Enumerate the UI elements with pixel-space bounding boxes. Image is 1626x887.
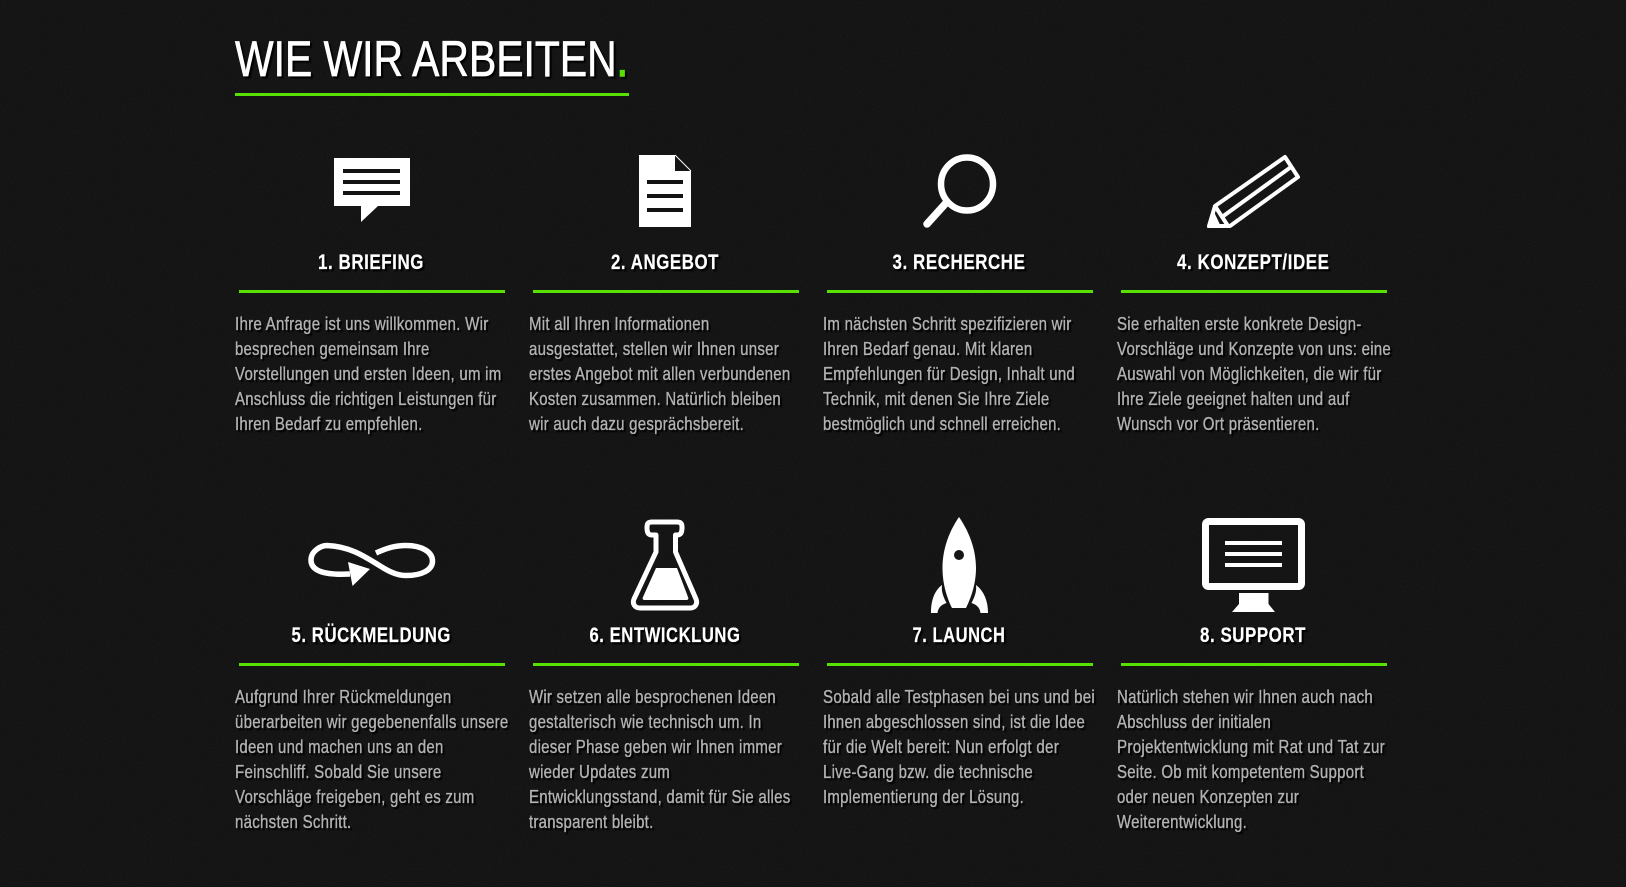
rule: step 2 <box>533 290 799 293</box>
text: step 7 description: Ihnen abgeschlossen sind, ist die Idee <box>823 712 1085 732</box>
text: step 3 description: bestmöglich und schnell erreichen. <box>823 414 1061 434</box>
heading: 4. Konzept/Idee: 4. KONZEPT/IDEE <box>1177 250 1330 274</box>
icon: monitor <box>1206 522 1302 612</box>
text: step 2 description: ausgestattet, stellen wir Ihnen unser <box>529 339 779 359</box>
text: step 6 description: gestalterisch wie technisch um. In <box>529 712 762 732</box>
panel: step 7 launch <box>823 517 1095 807</box>
text: step 1 description: besprechen gemeinsam Ihre <box>235 339 430 359</box>
text: step 3 description: Empfehlungen für Design, Inhalt und <box>823 364 1075 384</box>
text: step 3 description <box>823 314 1075 434</box>
rule: step 5 <box>239 663 505 666</box>
text: step 3 description: Ihren Bedarf genau. Mit klaren <box>823 339 1032 359</box>
text: step 2 description: erstes Angebot mit allen verbundenen <box>529 364 790 384</box>
text: step 3 description: Im nächsten Schritt spezifizieren wir <box>823 314 1072 334</box>
icon: flask <box>633 522 697 608</box>
text: step 1 description: Vorstellungen und ersten Ideen, um im <box>235 364 502 384</box>
text: step 2 description <box>528 314 790 434</box>
text: step 4 description: Auswahl von Möglichkeiten, die wir für <box>1117 364 1382 384</box>
heading: 6. Entwicklung: 6. ENTWICKLUNG <box>590 623 740 647</box>
panel: step 5 rueckmeldung <box>235 546 508 832</box>
text: step 4 description: Vorschläge und Konzepte von uns: eine <box>1117 339 1391 359</box>
rule: step 4 <box>1121 290 1387 293</box>
title: WIE WIR ARBEITEN. <box>235 31 628 87</box>
heading: 1. Briefing: 1. BRIEFING <box>318 250 424 274</box>
text: step 7 description: Live-Gang bzw. die technische <box>823 762 1033 782</box>
panel: step 8 support <box>1117 522 1387 832</box>
text: step 5 description: Ideen und machen uns an den <box>235 737 444 757</box>
text: step 6 description: Wir setzen alle besprochenen Ideen <box>529 687 776 707</box>
text: step 5 description <box>235 687 508 832</box>
text: step 5 description: Vorschläge freigeben, geht es zum <box>235 787 474 807</box>
text: step 5 description: Aufgrund Ihrer Rückmeldungen <box>235 687 452 707</box>
text: step 6 description: transparent bleibt. <box>529 812 654 832</box>
text: step 8 description: oder neuen Konzepten zur <box>1117 787 1299 807</box>
text: step 4 description <box>1117 314 1391 434</box>
rule: step 8 <box>1121 663 1387 666</box>
text: step 8 description: Weiterentwicklung. <box>1117 812 1247 832</box>
text: step 2 description: Mit all Ihren Informationen <box>529 314 710 334</box>
text: step 4 description: Ihre Ziele geeignet halten und auf <box>1117 389 1350 409</box>
heading: 8. Support: 8. SUPPORT <box>1200 623 1306 647</box>
text: step 7 description <box>823 687 1095 807</box>
text: step 6 description <box>528 687 790 832</box>
text: step 5 description: Feinschliff. Sobald Sie unsere <box>235 762 442 782</box>
text: step 7 description: Implementierung der Lösung. <box>823 787 1024 807</box>
text: step 8 description: Seite. Ob mit kompetentem Support <box>1117 762 1364 782</box>
panel: step 3 recherche <box>823 158 1093 434</box>
panel: step 6 entwicklung <box>528 522 799 832</box>
text: step 8 description <box>1117 687 1385 832</box>
text: step 1 description: Anschluss die richtigen Leistungen für <box>235 389 496 409</box>
heading: 2. Angebot: 2. ANGEBOT <box>611 250 719 274</box>
text: step 7 description: für die Welt bereit: Nun erfolgt der <box>823 737 1059 757</box>
text: step 8 description: Natürlich stehen wir Ihnen auch nach <box>1117 687 1373 707</box>
text: step 5 description: nächsten Schritt. <box>235 812 352 832</box>
rule: step 7 <box>827 663 1093 666</box>
rule: step 1 <box>239 290 505 293</box>
text: step 2 description: Kosten zusammen. Natürlich bleiben <box>529 389 781 409</box>
text: step 6 description: Entwicklungsstand, damit für Sie alles <box>529 787 790 807</box>
heading: 5. Rückmeldung: 5. RÜCKMELDUNG <box>292 622 451 647</box>
text: step 4 description: Sie erhalten erste konkrete Design- <box>1117 314 1362 334</box>
text: step 3 description: Technik, mit denen Sie Ihre Ziele <box>823 389 1050 409</box>
icon: rocket <box>931 517 988 613</box>
text: step 8 description: Projektentwicklung mit Rat und Tat zur <box>1117 737 1385 757</box>
rule: step 6 <box>533 663 799 666</box>
text: step 1 description <box>235 314 502 434</box>
text: step 1 description: Ihren Bedarf zu empfehlen. <box>235 414 422 434</box>
icon: infinity loop with arrow <box>311 546 432 586</box>
text: step 6 description: dieser Phase geben wir Ihnen immer <box>529 737 782 757</box>
text: step 6 description: wieder Updates zum <box>528 762 670 782</box>
text: step 2 description: wir auch dazu gesprächsbereit. <box>528 414 744 434</box>
text: step 1 description: Ihre Anfrage ist uns willkommen. Wir <box>235 314 488 334</box>
text: step 8 description: Abschluss der initialen <box>1117 712 1271 732</box>
icon: pencil <box>1208 157 1298 227</box>
panel: step 1 briefing <box>235 158 505 434</box>
icon: magnifier <box>927 158 993 224</box>
icon: speech bubble <box>334 158 410 222</box>
panel: step 4 konzept <box>1117 157 1391 434</box>
icon: document <box>639 155 691 227</box>
text: step 4 description: Wunsch vor Ort präsentieren. <box>1117 414 1320 434</box>
text: step 7 description: Sobald alle Testphasen bei uns und bei <box>823 687 1095 707</box>
heading: 3. Recherche: 3. RECHERCHE <box>892 250 1026 274</box>
panel: step 2 angebot <box>528 155 799 434</box>
text: step 5 description: überarbeiten wir gegebenenfalls unsere <box>235 712 508 732</box>
heading: 7. Launch: 7. LAUNCH <box>912 623 1006 647</box>
rule: step 3 <box>827 290 1093 293</box>
